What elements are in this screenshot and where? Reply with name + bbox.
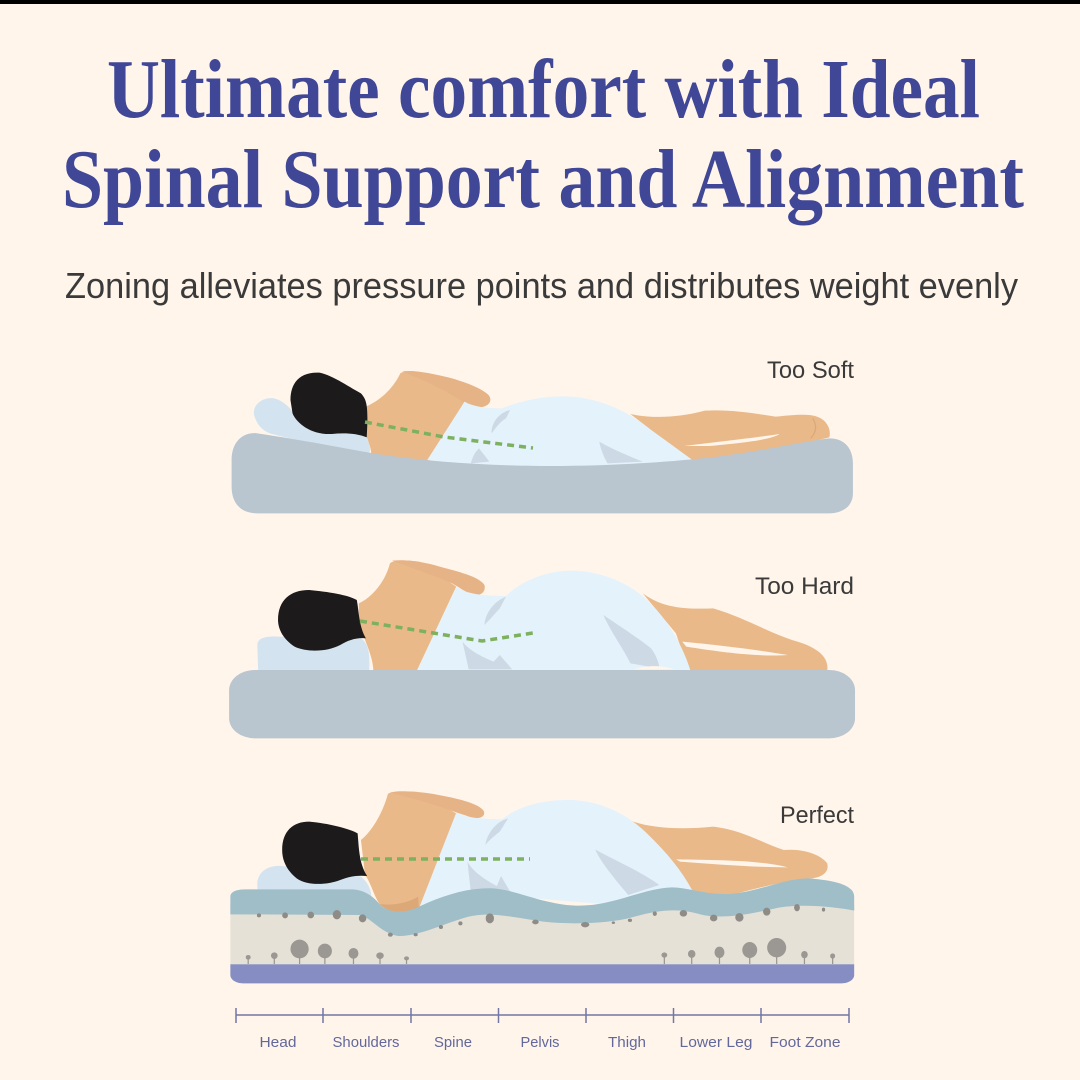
mattress: too hard [229, 670, 855, 738]
hair [278, 590, 366, 651]
mattress: too soft [232, 433, 853, 513]
zone labels [260, 1034, 840, 1051]
pillow [257, 866, 371, 897]
spine line: curved [365, 422, 533, 448]
comfort foam layer [230, 905, 854, 964]
illustration: sleeper on too-soft mattress [232, 371, 853, 513]
label: too hard: Too Hard [755, 573, 854, 600]
teal support layer [230, 878, 854, 936]
zone labels: Foot Zone [770, 1034, 840, 1051]
spine line: kinked [360, 621, 533, 641]
panel: perfect [230, 791, 854, 983]
label: too soft: Too Soft [767, 357, 854, 384]
zone labels: Head [260, 1034, 296, 1051]
illustration: sleeper on zoned mattress [230, 791, 854, 983]
panel: too hard [229, 560, 855, 738]
foam bubbles [257, 904, 825, 937]
zone axis [236, 1008, 849, 1051]
label: perfect: Perfect [780, 802, 854, 829]
zone labels: Spine [434, 1034, 472, 1051]
spine line: straight [361, 857, 530, 861]
hair [282, 822, 367, 884]
title [62, 43, 1024, 226]
title: Ultimate comfort with Ideal [107, 43, 980, 136]
zone labels: Shoulders [332, 1034, 400, 1051]
spring trees [246, 938, 835, 964]
illustration: sleeper on too-hard mattress [229, 560, 855, 738]
zone labels: Thigh [608, 1034, 646, 1051]
panel: too soft [232, 357, 854, 513]
zone labels: Pelvis [520, 1034, 560, 1051]
base layer [230, 964, 854, 983]
body [361, 791, 828, 913]
subtitle: Zoning alleviates pressure points and distributes weight evenly [65, 265, 1018, 306]
hair [290, 373, 367, 437]
zone labels: Lower Leg [680, 1034, 752, 1051]
